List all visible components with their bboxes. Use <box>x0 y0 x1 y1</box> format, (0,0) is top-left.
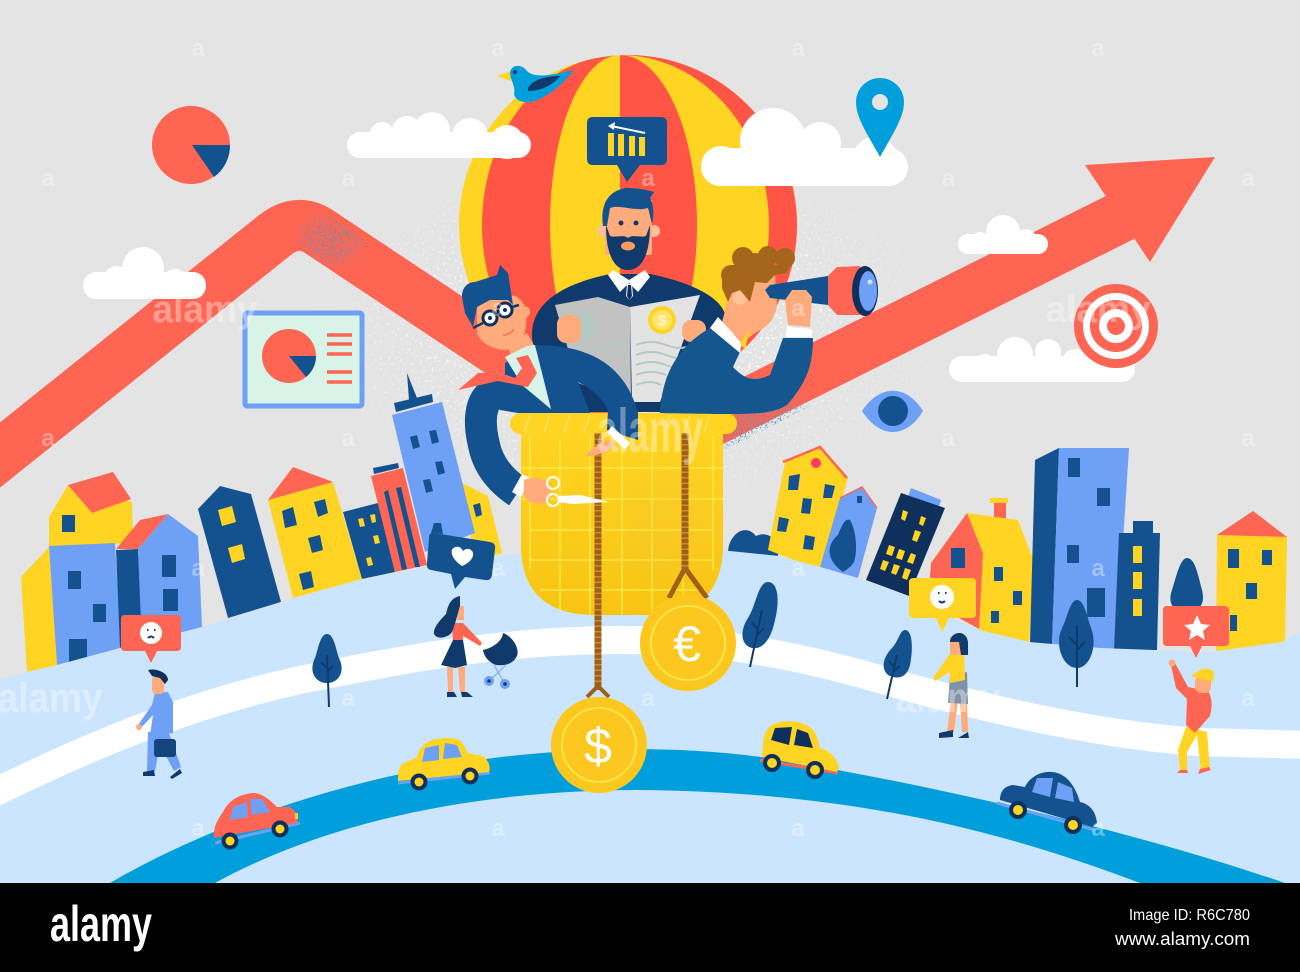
watermark: a <box>1091 555 1105 582</box>
dollar coin: $ <box>584 718 612 774</box>
footer logo: alamy <box>50 896 152 952</box>
small blue house with tree <box>820 487 877 578</box>
footer bar <box>0 883 1300 972</box>
tall buildings <box>343 373 502 579</box>
watermark: a <box>491 555 505 582</box>
newspaper <box>555 295 700 402</box>
watermark: a <box>791 35 805 62</box>
mother <box>434 596 482 697</box>
navy tower <box>1114 521 1160 650</box>
hot air balloon envelope <box>459 55 797 353</box>
cloud 4 <box>958 215 1048 254</box>
bush <box>728 530 778 556</box>
watermark: a <box>491 35 505 62</box>
watermark: a <box>791 295 805 322</box>
location pin <box>856 78 904 157</box>
watermark: a <box>791 815 805 842</box>
watermark: a <box>41 165 55 192</box>
trees <box>312 582 1094 707</box>
yellow car right <box>760 721 839 779</box>
watermark: a <box>641 165 655 192</box>
white road <box>0 640 1300 795</box>
torso <box>532 274 726 412</box>
newspaper: $ <box>658 312 666 328</box>
left skyline <box>21 373 502 672</box>
dark tower <box>866 488 945 596</box>
tree centre right <box>742 582 778 667</box>
watermark: a <box>941 165 955 192</box>
watermark: a <box>191 555 205 582</box>
left man with glasses <box>458 265 638 492</box>
collar <box>608 270 650 300</box>
watermark: alamy <box>597 397 703 466</box>
tree behind star bubble <box>1170 558 1203 612</box>
eye <box>862 391 923 432</box>
chart panel with pie <box>245 313 362 406</box>
watermark: a <box>41 425 55 452</box>
tree front of tower <box>1059 600 1094 687</box>
watermark: a <box>1241 425 1255 452</box>
yellow house with red roof <box>268 467 362 598</box>
right man with telescope <box>660 246 878 414</box>
navy car <box>997 772 1097 834</box>
ropes <box>587 433 707 697</box>
right yellow house <box>1216 511 1287 655</box>
watermark: a <box>341 425 355 452</box>
cloud 1 <box>347 112 531 159</box>
speech bubble: heart <box>427 523 495 589</box>
watermark: alamy <box>0 674 103 721</box>
watermark: a <box>491 815 505 842</box>
man with briefcase <box>136 669 182 779</box>
woman in yellow <box>933 633 969 738</box>
tall blue tower <box>1030 448 1129 650</box>
bird <box>497 66 574 102</box>
watermark: a <box>1091 35 1105 62</box>
watermark: a <box>791 555 805 582</box>
body and arm <box>660 328 813 414</box>
right arm <box>535 345 638 440</box>
centre man with newspaper <box>532 188 726 412</box>
cloud 2 <box>701 108 908 186</box>
watermark: alamy <box>152 289 258 331</box>
dollar coin <box>551 697 647 793</box>
left arm <box>481 390 518 492</box>
watermark: a <box>641 685 655 712</box>
watermark: a <box>491 295 505 322</box>
euro coin: € <box>673 616 701 672</box>
yellow car left <box>398 738 490 790</box>
euro coin <box>640 595 736 691</box>
red car <box>214 793 300 850</box>
right skyline <box>728 446 1287 655</box>
basket rim <box>510 413 737 434</box>
scissors and hand <box>512 474 609 506</box>
left houses <box>21 472 281 672</box>
speech bubble: smile <box>909 578 976 632</box>
head <box>597 188 660 270</box>
hair <box>721 246 795 302</box>
neck <box>508 333 535 360</box>
speech bubble: star <box>1163 606 1229 658</box>
cloud 3 <box>83 247 206 299</box>
pie chart icon <box>152 106 230 184</box>
pram <box>483 633 518 689</box>
red and yellow house <box>930 498 1034 642</box>
watermark: a <box>191 815 205 842</box>
hand <box>785 290 812 327</box>
tree left <box>312 634 342 707</box>
watermark: a <box>1091 815 1105 842</box>
telescope <box>765 266 878 316</box>
watermark: alamy <box>896 674 1001 721</box>
watermark: a <box>1241 165 1255 192</box>
red zigzag growth arrow <box>0 157 1215 487</box>
ground hill <box>0 550 1300 883</box>
target <box>1074 284 1158 368</box>
tie <box>458 355 537 390</box>
boy waving <box>1168 660 1214 774</box>
watermark: a <box>191 35 205 62</box>
balloon basket <box>510 413 737 615</box>
hands <box>557 315 581 343</box>
watermark: a <box>341 165 355 192</box>
image id: Image ID: R6C780 <box>1129 907 1250 924</box>
watermark: alamy <box>1046 289 1150 331</box>
gabled yellow house <box>768 446 848 570</box>
head <box>462 265 530 350</box>
speech bubble: falling chart <box>587 117 667 182</box>
blue arc road <box>110 749 1285 883</box>
mother with pram <box>434 596 518 697</box>
speech bubble: sad face <box>121 615 181 663</box>
neck and face <box>722 275 777 342</box>
watermark: a <box>341 685 355 712</box>
watermark: a <box>941 425 955 452</box>
shirt <box>505 345 552 410</box>
website: www.alamy.com <box>1114 929 1250 949</box>
watermark: a <box>1241 685 1255 712</box>
tree right of road <box>884 630 912 699</box>
basket body <box>521 430 723 615</box>
cloud 5 <box>949 337 1135 382</box>
